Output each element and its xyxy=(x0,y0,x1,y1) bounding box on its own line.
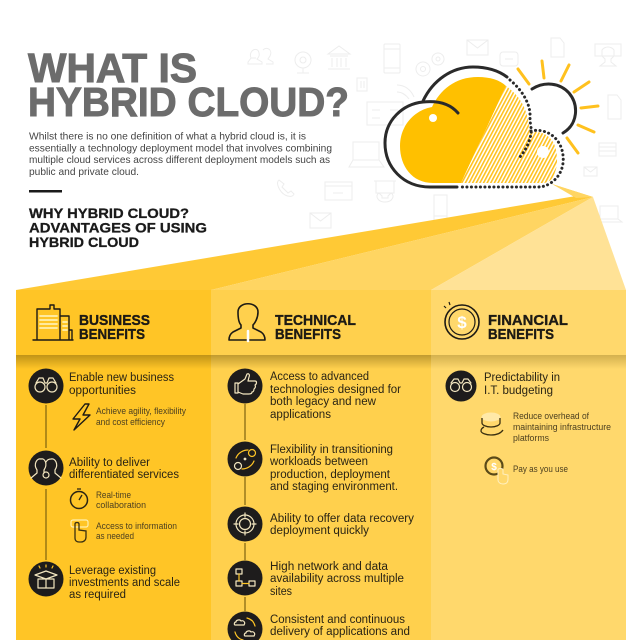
sub-item: pay as you use xyxy=(486,458,568,484)
sun rays xyxy=(518,61,598,153)
item: network availability: High network and data xyxy=(270,561,389,573)
icon: technical person xyxy=(229,304,265,341)
cloud highlights xyxy=(429,114,549,158)
subheading: HYBRID CLOUD xyxy=(29,234,139,250)
item: differentiated services xyxy=(28,450,179,486)
sub-item: reduce overhead: Reduce overhead of xyxy=(513,411,589,421)
sub-item: access to information: Access to information xyxy=(96,521,177,531)
item: new business opportunities: Enable new business xyxy=(69,372,174,384)
item: advanced technologies: Access to advanced xyxy=(270,371,369,383)
item: predictability: Predictability in xyxy=(484,372,560,384)
heading xyxy=(275,312,356,343)
sub-item: agility: and cost efficiency xyxy=(96,417,165,427)
item: consistent delivery xyxy=(228,612,410,640)
title: HYBRID CLOUD? xyxy=(28,79,349,125)
heading xyxy=(488,312,568,343)
cloud fill: hatched xyxy=(461,86,557,183)
sub-item: access to information: as needed xyxy=(96,531,134,541)
hybrid cloud illustration xyxy=(385,61,598,187)
cloud dotted outline xyxy=(460,80,563,187)
sub-item: access to information xyxy=(71,520,177,542)
connector lines xyxy=(244,404,246,611)
item: flexibility in transitioning: workloads between xyxy=(269,456,368,468)
item: network availability: availability across multiple xyxy=(270,573,404,585)
item: data recovery: deployment quickly xyxy=(270,525,369,537)
sub-item: agility: Achieve agility, flexibility xyxy=(96,406,186,416)
sub-item: real-time collaboration: Real-time xyxy=(96,490,131,500)
item: data recovery: Ability to offer data recovery xyxy=(270,513,414,525)
icon: office building xyxy=(33,305,73,340)
heading: BENEFITS xyxy=(275,326,341,343)
item: new business opportunities: opportunities xyxy=(69,385,136,397)
item: advanced technologies: technologies designed for xyxy=(270,384,401,396)
item: leverage investments: Leverage existing xyxy=(69,565,156,577)
item: leverage investments xyxy=(28,562,180,601)
sub-item: pay as you use: Pay as you use xyxy=(513,464,568,474)
sub-item: reduce overhead: platforms xyxy=(513,433,549,443)
item: advanced technologies xyxy=(228,368,401,421)
title: WHAT IS xyxy=(28,45,197,91)
light beams from cloud to panels xyxy=(16,184,626,290)
sub-item: real-time collaboration: collaboration xyxy=(96,500,146,510)
item: differentiated services: differentiated services xyxy=(69,469,179,481)
heading: TECHNICAL xyxy=(275,312,356,329)
item: new business opportunities xyxy=(28,368,174,404)
heading: FINANCIAL xyxy=(488,312,568,329)
sub-item: reduce overhead xyxy=(481,411,611,443)
subheading: WHY HYBRID CLOUD? xyxy=(29,205,189,221)
connector lines xyxy=(45,405,47,560)
background icons xyxy=(248,38,622,228)
item: consistent delivery: delivery of applications and xyxy=(270,626,410,638)
sun arc xyxy=(532,84,576,133)
cloud solid outline xyxy=(385,67,507,187)
intro paragraph: essentially a technology deployment model that involves combining xyxy=(29,142,332,154)
panel: technical benefits xyxy=(211,290,431,640)
divider dash xyxy=(29,190,62,192)
intro paragraph xyxy=(29,130,332,178)
item: network availability xyxy=(228,560,404,598)
panel: business benefits xyxy=(16,290,211,640)
icon: dollar coin xyxy=(444,302,479,339)
heading: BENEFITS xyxy=(488,326,554,343)
item: predictability xyxy=(446,370,560,402)
item: advanced technologies: applications xyxy=(270,409,331,421)
intro paragraph: Whilst there is no one definition of what a hybrid cloud is, it is xyxy=(29,130,306,142)
item: network availability: sites xyxy=(270,586,292,598)
item: flexibility in transitioning: production, deployment xyxy=(270,469,391,481)
title xyxy=(28,45,349,125)
cloud fill: solid xyxy=(400,77,506,183)
item: data recovery xyxy=(228,506,414,542)
item: leverage investments: as required xyxy=(69,589,126,601)
intro paragraph: public and private cloud. xyxy=(29,166,139,178)
item: flexibility in transitioning: and staging environment. xyxy=(270,481,398,493)
sub-item: pay as you use: $ xyxy=(491,462,497,473)
subheading xyxy=(29,205,207,250)
subheading: ADVANTAGES OF USING xyxy=(29,220,207,236)
icon: dollar coin: $ xyxy=(457,313,467,332)
item: differentiated services: Ability to deliver xyxy=(69,457,150,469)
sub-item: reduce overhead: maintaining infrastructure xyxy=(513,422,611,432)
sub-item: real-time collaboration xyxy=(70,489,146,510)
item: predictability: I.T. budgeting xyxy=(484,385,553,397)
heading xyxy=(79,312,150,343)
heading: BUSINESS xyxy=(79,312,150,329)
item: advanced technologies: both legacy and new xyxy=(270,396,377,408)
intro paragraph: multiple cloud services across different deployment models such as xyxy=(29,154,330,166)
sub-item: agility xyxy=(73,404,186,430)
item: flexibility in transitioning xyxy=(228,442,398,493)
item: leverage investments: investments and scale xyxy=(69,577,180,589)
panel: financial benefits xyxy=(431,290,626,640)
item: flexibility in transitioning: Flexibility in transitioning xyxy=(270,444,393,456)
item: consistent delivery: Consistent and continuous xyxy=(270,614,405,626)
heading: BENEFITS xyxy=(79,326,145,343)
